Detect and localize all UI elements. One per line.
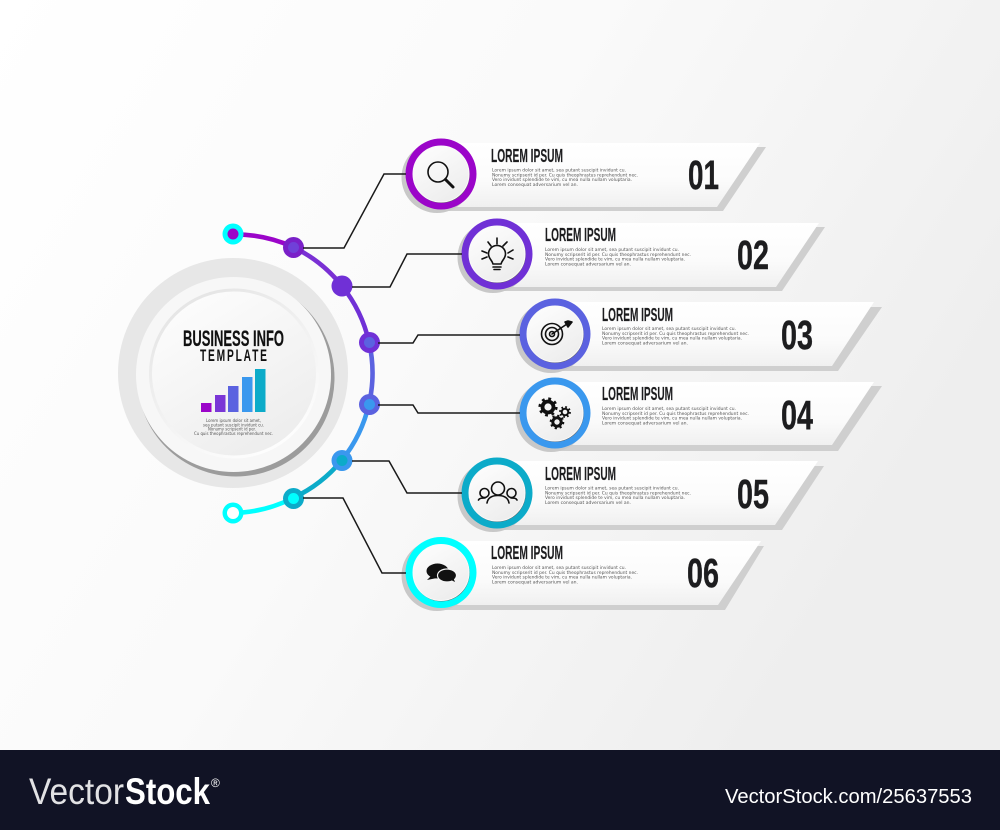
step 03 text: Nonumy scripserit id per. Cu quis theophrastus reprehendunt nec.	[602, 331, 749, 337]
icon: people	[478, 482, 517, 503]
step 03 text: Vero invidunt splendide te vim, cu mea nulla nullam voluptaria.	[602, 336, 742, 342]
step 01 text: Vero invidunt splendide te vim, cu mea nulla nullam voluptaria.	[492, 177, 632, 183]
footer image id: VectorStock.com/25637553	[725, 785, 972, 808]
center caption: Nonumy scripserit id per.	[208, 426, 256, 432]
step 02 text: Lorem consequat adversarium vel an.	[545, 261, 631, 267]
heading: business info: BUSINESS INFO	[183, 326, 284, 351]
number 02: 02	[737, 232, 769, 278]
center caption: sea putant suscipit invidunt cu.	[203, 422, 264, 428]
panel: step 06	[402, 537, 764, 611]
plate	[136, 277, 331, 472]
icon: light bulb	[482, 238, 513, 270]
step 04 text: Lorem consequat adversarium vel an.	[602, 420, 688, 426]
step 05 text: Lorem consequat adversarium vel an.	[545, 500, 631, 506]
panel: step 01	[402, 138, 766, 213]
step 03 heading: LOREM IPSUM	[602, 305, 673, 325]
step 05 text: Lorem ipsum dolor sit amet, sea putant suscipit invidunt cu.	[545, 486, 679, 492]
step 06 text	[492, 565, 638, 585]
step 06 text: Nonumy scripserit id per. Cu quis theophrastus reprehendunt nec.	[492, 570, 638, 576]
step 04 text: Nonumy scripserit id per. Cu quis theophrastus reprehendunt nec.	[602, 411, 749, 417]
icon: magnifier	[428, 162, 453, 187]
number 03: 03	[781, 312, 813, 358]
outer disc	[118, 258, 348, 488]
step 02 heading: LOREM IPSUM	[545, 225, 616, 245]
step 02 text: Lorem ipsum dolor sit amet, sea putant suscipit invidunt cu.	[545, 247, 679, 253]
panel: step 02	[458, 218, 825, 293]
step 01 text: Lorem ipsum dolor sit amet, sea putant suscipit invidunt cu.	[492, 168, 626, 174]
step 01 heading: LOREM IPSUM	[491, 146, 563, 166]
subheading: template: TEMPLATE	[200, 347, 267, 365]
step 05 text	[545, 486, 691, 506]
connector lines	[303, 174, 520, 573]
step 05 heading: LOREM IPSUM	[545, 464, 616, 484]
step 04 text: Lorem ipsum dolor sit amet, sea putant suscipit invidunt cu.	[602, 406, 736, 412]
timeline arc	[233, 234, 373, 513]
step 06 text: Lorem consequat adversarium vel an.	[492, 579, 578, 585]
step 04 text	[602, 406, 749, 426]
panel: step 05	[458, 458, 824, 532]
step 02 text: Vero invidunt splendide te vim, cu mea nulla nullam voluptaria.	[545, 256, 685, 262]
number 01: 01	[688, 152, 719, 198]
icon: gears	[540, 399, 570, 428]
step 02 text	[545, 247, 691, 267]
center caption: Lorem ipsum dolor sit amet,	[206, 418, 261, 424]
center caption: Cu quis theophrastus reprehendunt nec.	[194, 431, 273, 437]
step 03 text: Lorem consequat adversarium vel an.	[602, 340, 688, 346]
number 06: 06	[687, 550, 719, 596]
step 03 text	[602, 326, 749, 346]
timeline nodes	[222, 224, 380, 524]
footer logo	[29, 771, 220, 812]
footer logo: Stock	[125, 771, 210, 812]
number 04: 04	[781, 392, 813, 438]
step 01 text: Lorem consequat adversarium vel an.	[492, 182, 578, 188]
inner ring	[150, 290, 318, 457]
central circle panel	[118, 258, 348, 488]
panel: step 04	[516, 378, 882, 452]
number 05: 05	[737, 471, 769, 517]
step 01 text	[492, 168, 638, 188]
step 06 text: Vero invidunt splendide te vim, cu mea nulla nullam voluptaria.	[492, 574, 632, 580]
footer bar	[0, 750, 1000, 830]
panel: step 03	[516, 298, 882, 373]
step 05 text: Vero invidunt splendide te vim, cu mea nulla nullam voluptaria.	[545, 495, 685, 501]
step 06 text: Lorem ipsum dolor sit amet, sea putant suscipit invidunt cu.	[492, 565, 626, 571]
step 06 heading: LOREM IPSUM	[491, 543, 563, 563]
step 04 heading: LOREM IPSUM	[602, 384, 673, 404]
step 02 text: Nonumy scripserit id per. Cu quis theophrastus reprehendunt nec.	[545, 252, 691, 258]
bar chart	[201, 369, 266, 412]
step 03 text: Lorem ipsum dolor sit amet, sea putant suscipit invidunt cu.	[602, 326, 736, 332]
plate shadow	[138, 280, 334, 476]
footer logo: Vector	[29, 771, 124, 812]
icon: target	[542, 321, 572, 344]
step 04 text: Vero invidunt splendide te vim, cu mea nulla nullam voluptaria.	[602, 416, 742, 422]
footer logo: ®	[211, 776, 220, 790]
step 01 text: Nonumy scripserit id per. Cu quis theophrastus reprehendunt nec.	[492, 172, 638, 178]
center caption	[194, 418, 273, 437]
step 05 text: Nonumy scripserit id per. Cu quis theophrastus reprehendunt nec.	[545, 490, 691, 496]
icon: speech bubbles	[426, 564, 456, 582]
